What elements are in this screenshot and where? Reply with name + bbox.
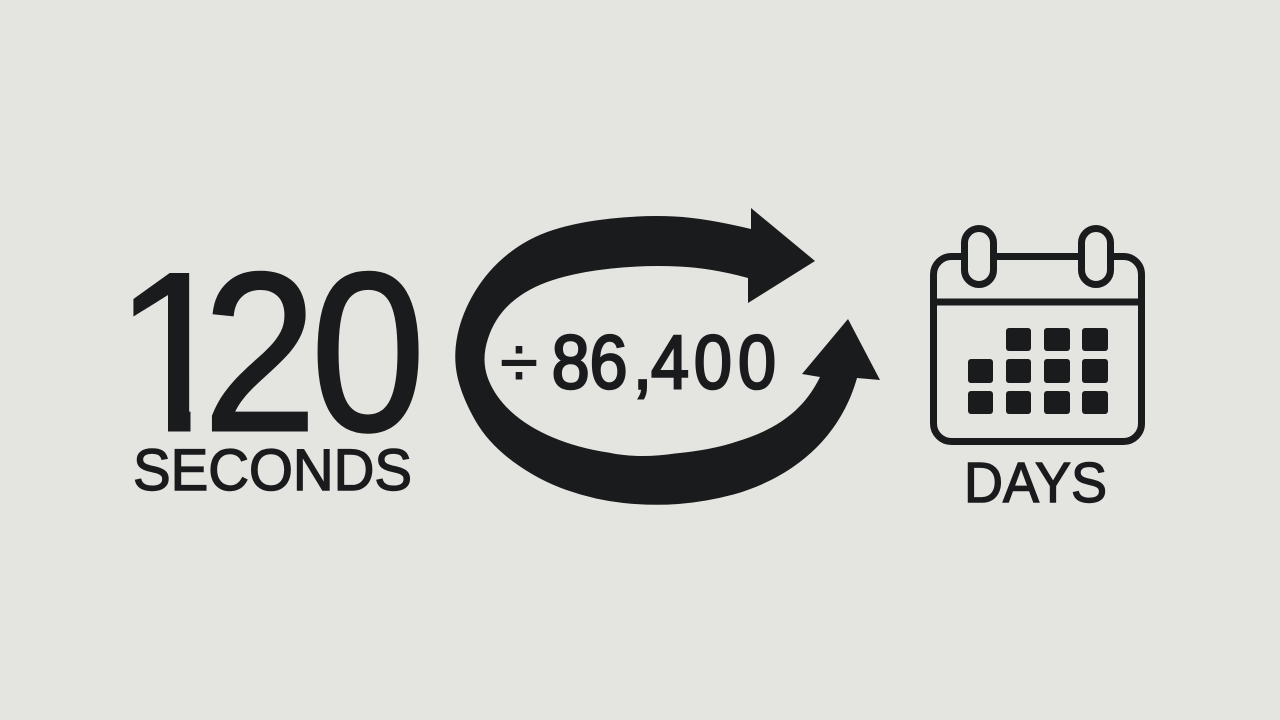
calendar body <box>934 256 1142 442</box>
infographic canvas <box>133 208 1145 505</box>
label: days: DAYS <box>964 451 1107 515</box>
divisor text <box>500 321 776 405</box>
label: seconds: SECONDS <box>133 438 412 503</box>
digit 0: 0 <box>311 225 425 478</box>
digit 2: 2 <box>203 226 317 478</box>
circular arrow <box>455 208 880 505</box>
ring left <box>964 228 994 284</box>
division sign: ÷ <box>500 323 538 403</box>
number: 120 <box>133 270 419 434</box>
ring right <box>1082 228 1110 284</box>
divisor number: 86,400 <box>552 321 776 405</box>
digit 1: 1 <box>114 225 235 478</box>
date cells <box>968 328 1108 414</box>
header line <box>933 298 1142 306</box>
icon: calendar <box>933 228 1142 442</box>
